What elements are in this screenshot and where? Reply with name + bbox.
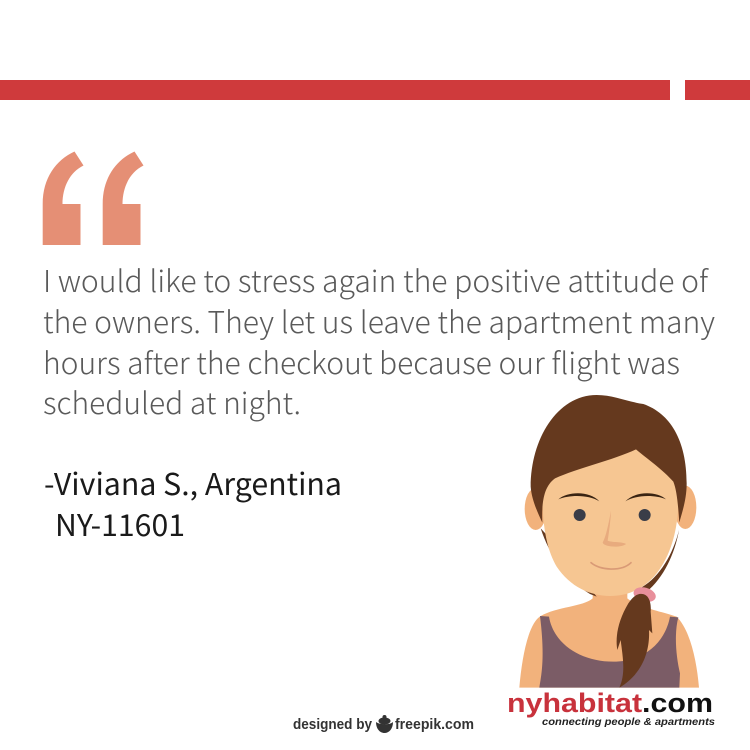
illustration: woman with ponytail <box>519 395 699 688</box>
ears <box>525 488 547 530</box>
icon: opening quotation marks <box>43 152 144 245</box>
attribution <box>44 460 342 545</box>
logo: nyhabitat.com: connecting people & apartments <box>542 716 715 728</box>
ponytail strand <box>642 530 679 592</box>
eyebrows <box>558 493 666 501</box>
hair tie <box>632 585 657 604</box>
testimonial quote text <box>43 257 715 423</box>
credit: designed by freepik: designed by <box>293 717 372 733</box>
shoulders and neck <box>519 587 699 688</box>
testimonial quote text: I would like to stress again the positive attitude of <box>43 257 709 301</box>
top hair <box>531 395 687 523</box>
credit: designed by freepik: freepik.com <box>395 717 474 733</box>
tank top <box>539 616 680 688</box>
logo: nyhabitat.com: nyhabitat .com <box>507 688 713 718</box>
credit: designed by freepik <box>293 715 474 733</box>
ponytail tail <box>617 594 652 688</box>
eyes <box>574 509 586 521</box>
back hair strip <box>541 528 597 597</box>
mouth <box>591 563 631 569</box>
testimonial quote text: scheduled at night. <box>43 379 301 423</box>
attribution: -Viviana S., Argentina <box>44 460 342 504</box>
testimonial quote text: hours after the checkout because our flight was <box>43 339 680 383</box>
red header bar <box>0 80 750 100</box>
attribution: NY-11601 <box>55 501 185 545</box>
testimonial quote text: the owners. They let us leave the apartment many <box>43 298 715 342</box>
face <box>542 447 679 596</box>
nose <box>603 511 626 547</box>
icon: freepik mascot <box>376 715 393 733</box>
